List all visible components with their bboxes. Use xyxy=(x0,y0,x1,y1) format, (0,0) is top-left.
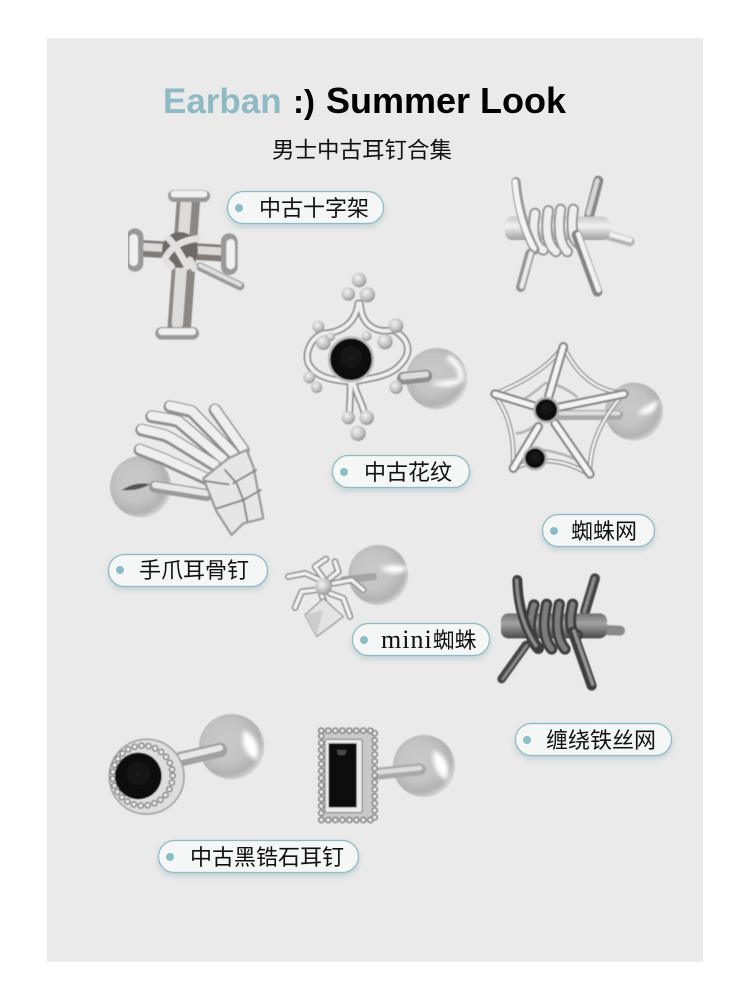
label: claw cartilage stud: 手爪耳骨钉 xyxy=(139,558,249,583)
label: wrapped barbed wire xyxy=(516,724,672,756)
title: :) xyxy=(293,83,315,120)
label: vintage cross xyxy=(228,192,384,224)
label: mini spider xyxy=(352,624,490,656)
earring: mini spider xyxy=(288,545,408,637)
title: Earban xyxy=(163,82,282,121)
earring: rectangular black zircon stud xyxy=(321,731,455,820)
earring: silver barbed wire xyxy=(505,181,630,292)
earring: spider web xyxy=(494,346,663,475)
earring: round black zircon stud xyxy=(109,714,264,814)
label: claw cartilage stud xyxy=(108,554,268,586)
subtitle: 男士中古耳钉合集 xyxy=(272,138,452,163)
label: vintage black zircon studs: 中古黑锆石耳钉 xyxy=(190,845,344,870)
label: vintage black zircon studs xyxy=(158,840,358,872)
label: spider web xyxy=(542,514,654,546)
label: spider web: 蜘蛛网 xyxy=(571,519,637,544)
label: vintage pattern xyxy=(332,456,470,488)
earring: skeleton hand xyxy=(110,406,263,535)
earring: dark barbed wire xyxy=(501,578,620,686)
label: mini spider: mini蜘蛛 xyxy=(381,625,477,654)
earring: vintage flower pattern xyxy=(303,273,467,441)
title: Summer Look xyxy=(326,80,567,121)
label: wrapped barbed wire: 缠绕铁丝网 xyxy=(546,728,656,753)
earring: nail cross xyxy=(134,194,240,333)
title xyxy=(163,80,567,121)
label: vintage cross: 中古十字架 xyxy=(259,196,369,221)
label: vintage pattern: 中古花纹 xyxy=(364,460,452,485)
